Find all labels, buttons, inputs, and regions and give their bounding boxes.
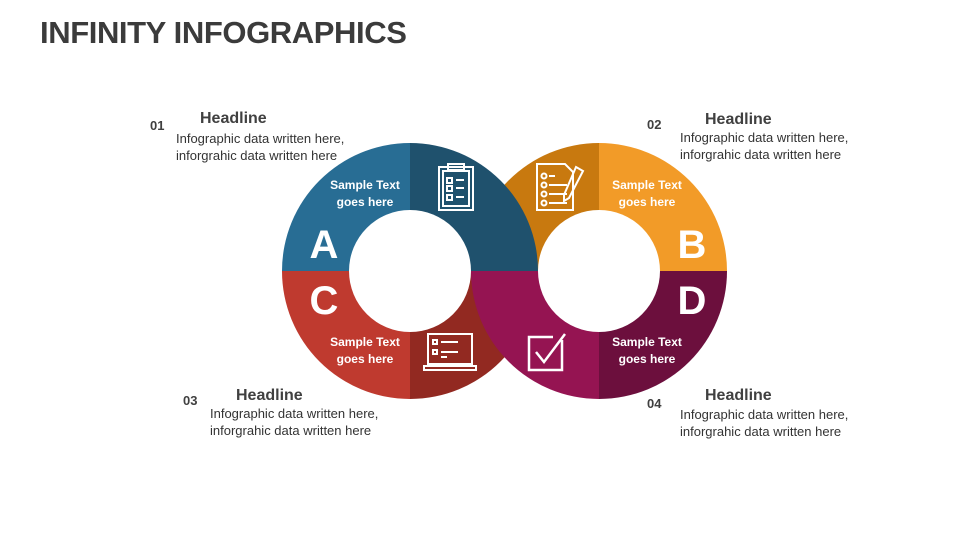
sample texts: Sample Text [330, 335, 400, 349]
letters: A [310, 223, 338, 267]
icon: clipboard [439, 164, 473, 210]
text block 01: 01 [150, 118, 164, 133]
text block 04: 04 [647, 396, 661, 411]
letters: C [310, 279, 338, 323]
icon: checklist with pencil [537, 164, 583, 210]
sample texts [330, 178, 682, 366]
text block 04: inforgrahic data written here [680, 424, 841, 439]
text block 04 [647, 387, 848, 439]
icon: checkbox [529, 334, 565, 370]
segment: A [282, 143, 538, 271]
segment: right top [471, 143, 727, 271]
text block 04: Infographic data written here, [680, 407, 848, 422]
text block 01: inforgrahic data written here [176, 148, 337, 163]
text block 02: Infographic data written here, [680, 130, 848, 145]
letters [310, 223, 706, 323]
text block 01 [150, 110, 344, 163]
text block 02: inforgrahic data written here [680, 147, 841, 162]
text block 03: inforgrahic data written here [210, 423, 371, 438]
sample texts: goes here [619, 352, 676, 366]
text block 04: Headline [705, 387, 772, 404]
segment: C [282, 271, 538, 399]
sample texts: Sample Text [330, 178, 400, 192]
title: INFINITY INFOGRAPHICS [40, 15, 406, 50]
sample texts: Sample Text [612, 178, 682, 192]
text block 01: Infographic data written here, [176, 131, 344, 146]
sample texts: goes here [337, 352, 394, 366]
sample texts: Sample Text [612, 335, 682, 349]
letters: B [678, 223, 706, 267]
text block 02: Headline [705, 111, 772, 128]
letters: D [678, 279, 706, 323]
segment: D [471, 271, 727, 399]
text block 03 [183, 387, 378, 438]
text block 03: Infographic data written here, [210, 406, 378, 421]
sample texts: goes here [337, 195, 394, 209]
sample texts: goes here [619, 195, 676, 209]
icon: laptop [424, 334, 476, 370]
text block 01: Headline [200, 110, 267, 127]
text block 03: Headline [236, 387, 303, 404]
text block 02: 02 [647, 117, 661, 132]
text block 03: 03 [183, 393, 197, 408]
text block 02 [647, 111, 848, 162]
